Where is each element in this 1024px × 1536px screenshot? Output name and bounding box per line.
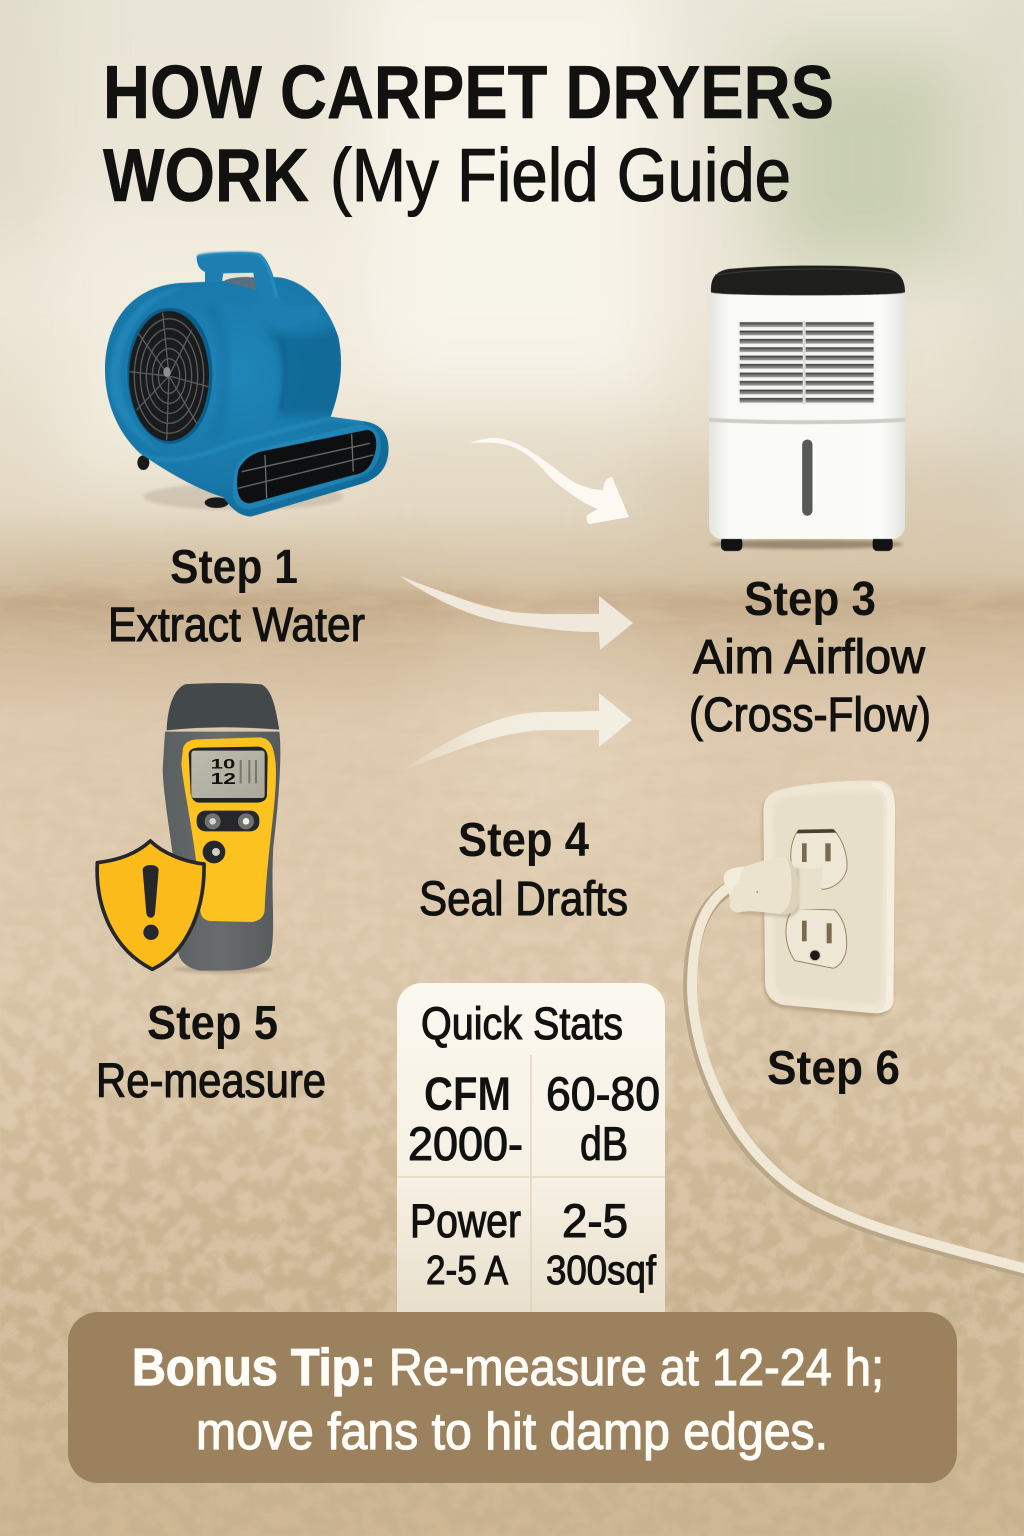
warning shield [97,841,204,969]
stat: CFM [408,1067,523,1170]
step 3 label: Step 3 [744,573,876,626]
stat: noise [546,1067,660,1170]
callout: bonus tip: move fans to hit damp edges. [196,1403,828,1461]
fan handle [197,252,321,328]
stat: CFM: 2000- [408,1117,523,1170]
stat: coverage [546,1194,657,1293]
step 6 label: Step 6 [767,1042,900,1095]
receptacle top [791,829,847,889]
title: WORK [103,133,309,217]
meter screen: 10 [211,756,236,772]
stat: noise: 60-80 [546,1067,660,1120]
arrow: middle [400,576,633,650]
icon: dehumidifier [709,265,906,551]
meter screen: 12 [211,771,236,788]
stat: coverage: 300sqf [546,1247,657,1293]
callout: bonus tip: Bonus Tip: Re-measure at 12-24 h; [132,1339,884,1397]
stat: power: 2-5 A [426,1247,509,1293]
receptacle bottom [786,908,847,968]
stat: power: Power [410,1194,521,1247]
title: HOW CARPET DRYERS [103,50,834,134]
fan body shading [110,287,363,460]
stat: power [410,1194,521,1293]
stat: CFM: CFM [424,1067,511,1120]
stat: coverage: 2-5 [562,1194,628,1247]
arrow: lower [403,693,632,770]
meter buttons [197,811,259,863]
arrow: top curved [470,438,629,524]
outlet grille [237,430,376,503]
step 5 label: Step 5 [147,997,278,1050]
step 5 label: Re-measure [96,1055,326,1108]
step 4 label: Step 4 [458,814,589,867]
icon: blue air mover fan [105,252,389,516]
step 1 label: Step 1 [170,541,298,594]
step 3 label: (Cross-Flow) [689,689,931,742]
water window [802,439,813,516]
arrows: airflow [400,438,633,770]
icon: wall outlet with plug [724,781,895,1017]
step 4 label [419,814,628,926]
fan grille [129,311,209,441]
plug [724,857,823,915]
stats heading: Quick Stats [421,998,623,1049]
icon: moisture meter with warning shield [97,683,280,973]
step 5 label [96,997,326,1108]
title [103,50,834,217]
title: (My Field Guide [330,133,791,217]
step 1 label [108,541,365,652]
step 1 label: Extract Water [108,599,365,652]
meter screen [189,747,268,803]
step 4 label: Seal Drafts [419,873,628,926]
callout: bonus tip [68,1312,957,1483]
vent louvers [738,320,876,405]
stat: noise: dB [580,1117,628,1170]
step 3 label [689,573,931,742]
step 3 label: Aim Airflow [693,631,925,684]
icon: power cord [690,882,1024,1272]
panel: quick stats [397,983,665,1314]
